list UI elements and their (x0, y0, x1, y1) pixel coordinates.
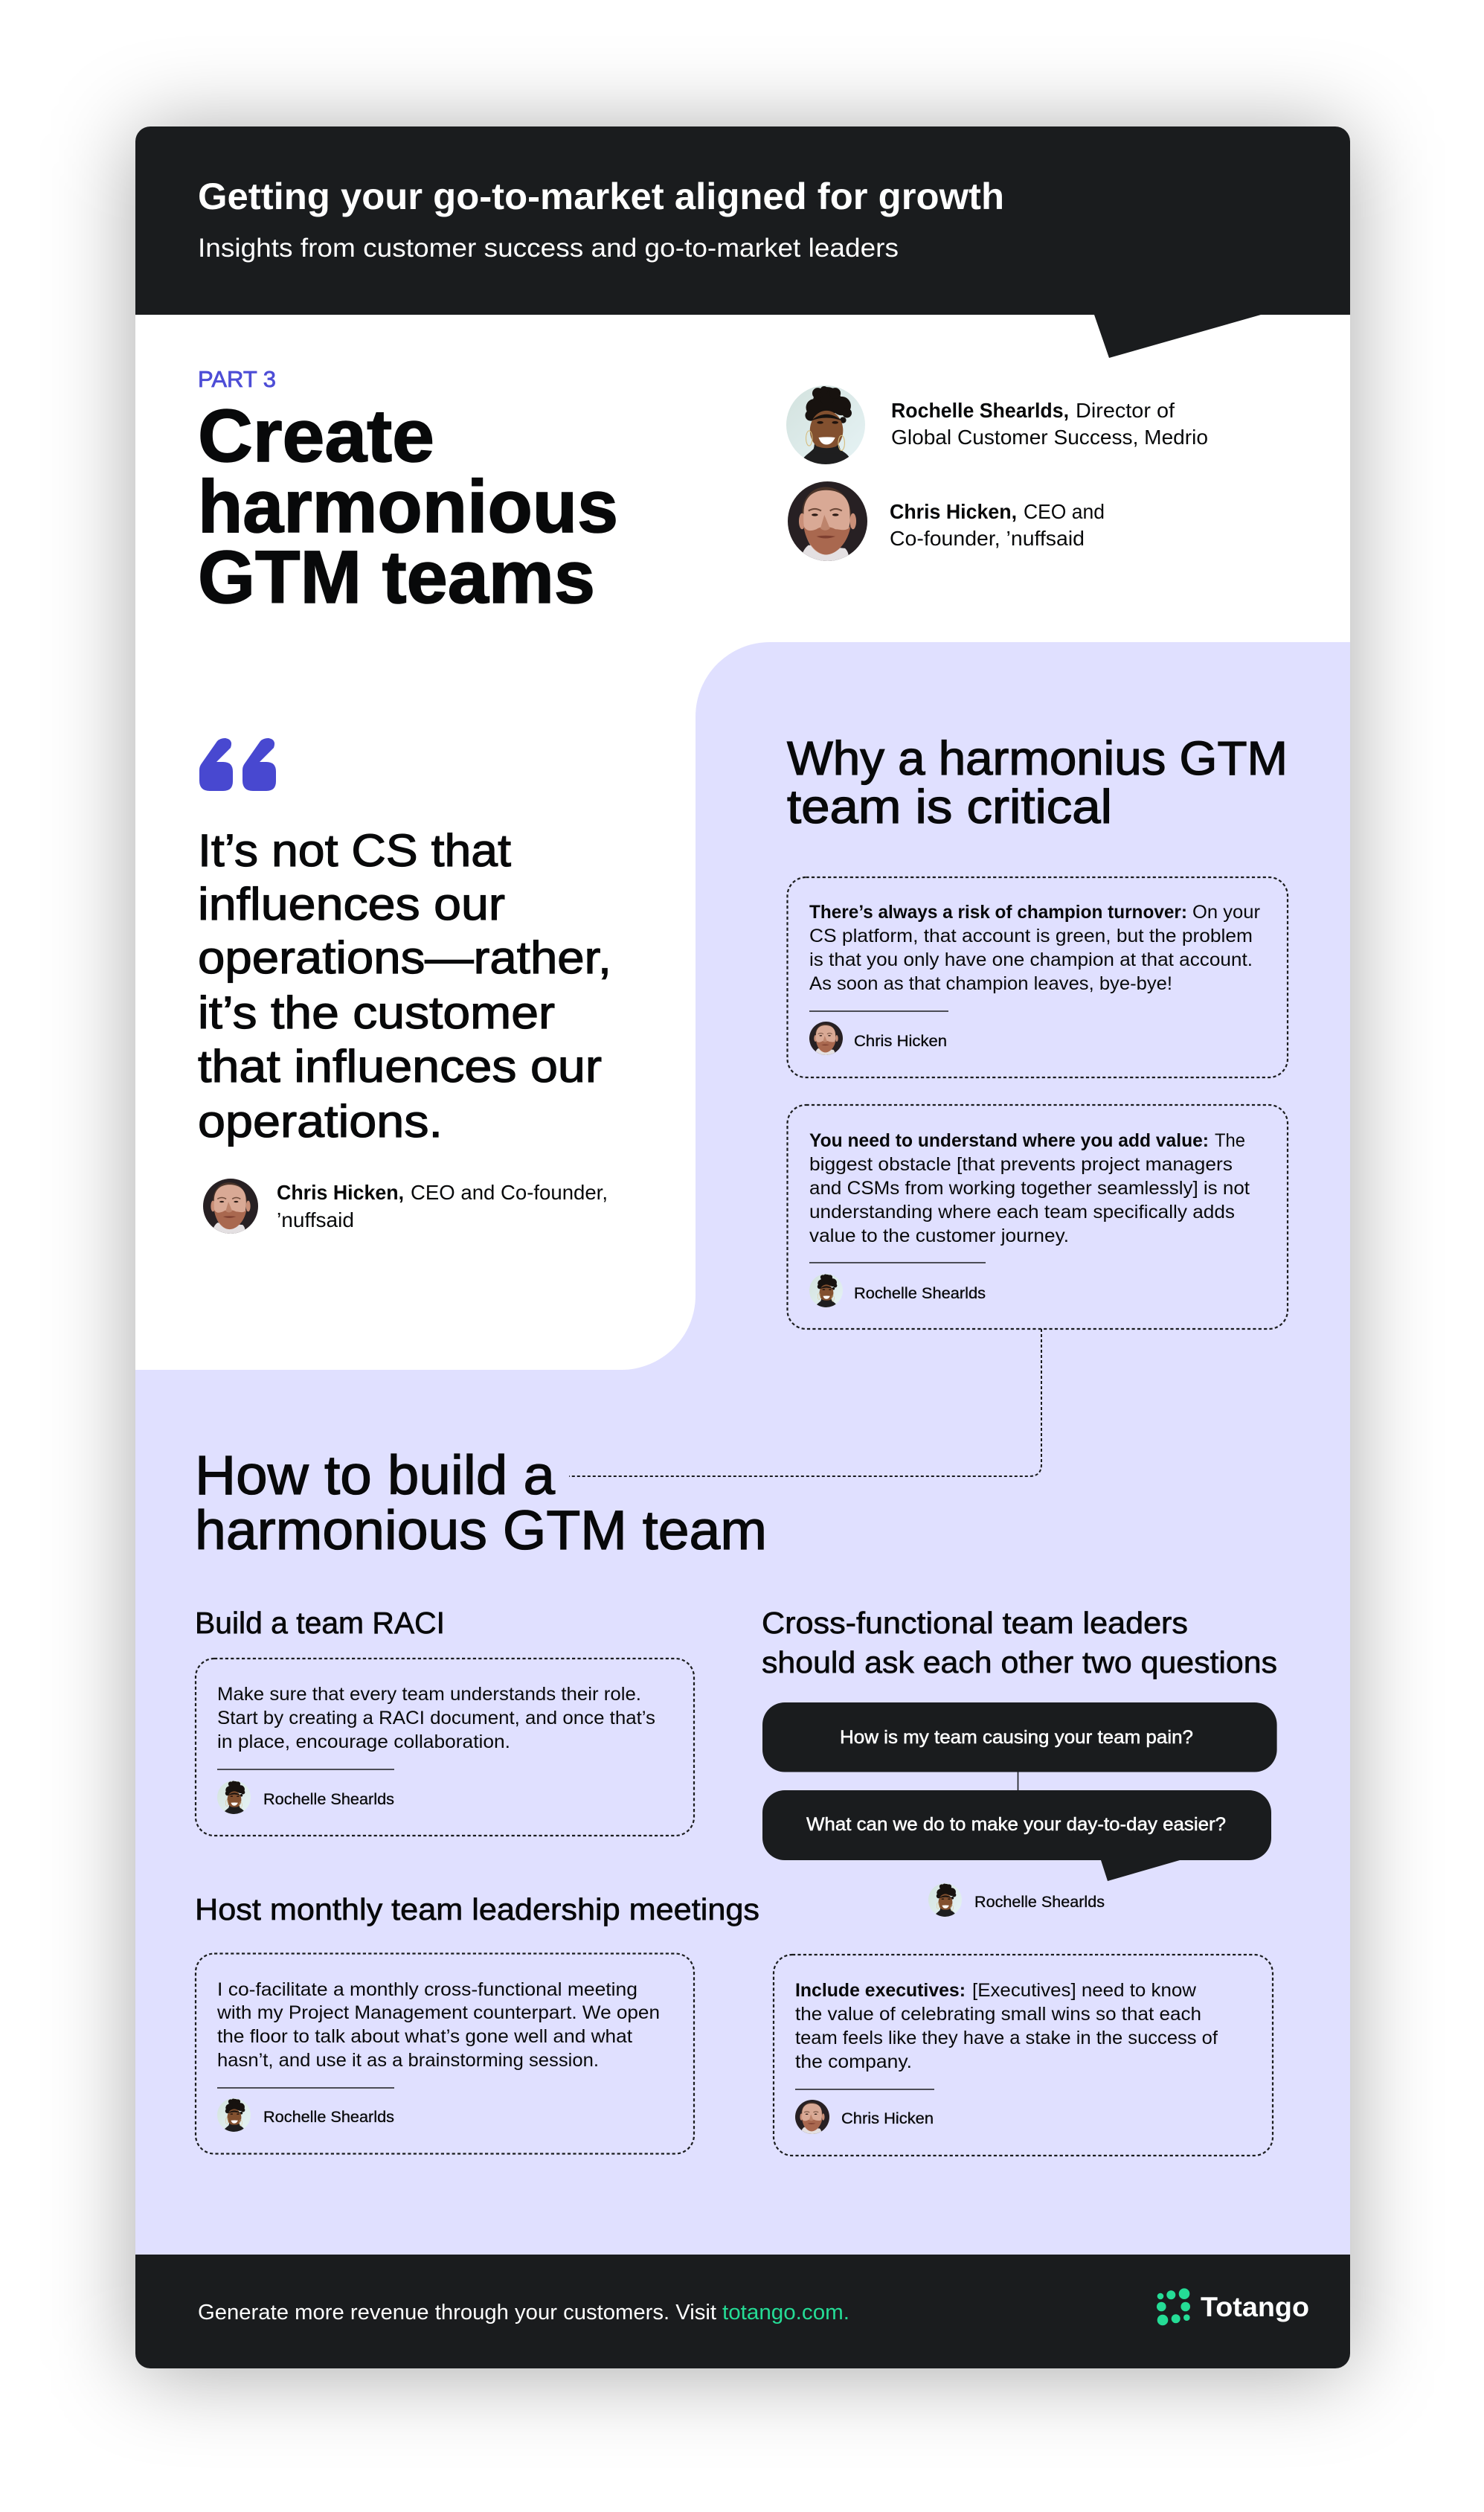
callout: understand where you add value (787, 1105, 1288, 1329)
attribution: Chris Hicken (854, 1033, 947, 1050)
callout: RACI (196, 1659, 694, 1836)
callout text: There’s always a risk of champion turnover: (809, 902, 1187, 923)
callout text: with my Project Management counterpart. We open (216, 2002, 660, 2023)
quote attribution: ’nuffsaid (277, 1208, 354, 1231)
callout text: Make sure that every team understands their role. (217, 1684, 641, 1705)
speaker text (890, 500, 1105, 550)
callout text (217, 1684, 655, 1752)
attribution: Chris Hicken (841, 2110, 934, 2127)
icon: quotation mark (199, 738, 276, 791)
main title: Create (198, 394, 434, 478)
quote attribution (203, 1179, 608, 1234)
callout: include executives (774, 1955, 1273, 2156)
callout text (809, 1130, 1250, 1246)
panel: pull quote (198, 738, 611, 1234)
subheading: cross-functional questions: Cross-functional team leaders (762, 1606, 1188, 1640)
speaker: Chris Hicken (788, 481, 1105, 561)
quote text: operations—rather, (198, 932, 611, 983)
speaker text: Chris Hicken, (890, 500, 1017, 523)
attribution: Rochelle Shearlds (263, 1791, 394, 1808)
lavender background panel (135, 642, 1350, 2262)
callout text (795, 1980, 1218, 2072)
logo: Totango: Totango (1201, 2292, 1309, 2322)
speaker: Rochelle Shearlds (786, 385, 1208, 464)
header banner (135, 126, 1350, 358)
attribution (795, 2100, 934, 2134)
arrow: dotted connector (569, 1329, 1041, 1476)
quote text: influences our (198, 879, 505, 929)
callout text: CS platform, that account is green, but the problem (809, 926, 1253, 946)
card shadow (135, 131, 1350, 2373)
callout text: On your (1192, 902, 1260, 923)
attribution: questions (928, 1883, 1105, 1917)
avatar: Rochelle (786, 385, 865, 464)
callout text (216, 1979, 660, 2071)
footer text: totango.com. (722, 2301, 849, 2324)
subheading: cross-functional questions (762, 1606, 1277, 1679)
main title: harmonious (198, 465, 618, 548)
attribution: questions: Rochelle Shearlds (974, 1894, 1105, 1911)
quote attribution: CEO and Co-founder, (411, 1181, 608, 1204)
callout text: As soon as that champion leaves, bye-bye! (809, 973, 1172, 994)
speaker text: CEO and (1024, 500, 1105, 523)
quote text (198, 825, 611, 1147)
callout text: the value of celebrating small wins so that each (795, 2004, 1201, 2025)
quote attribution: Chris Hicken, (277, 1181, 404, 1204)
callout text: the floor to talk about what’s gone well and what (217, 2026, 632, 2047)
heading: how to build: harmonious GTM team (195, 1499, 767, 1561)
footer text: Generate more revenue through your customers. Visit (198, 2301, 716, 2324)
speaker text: Co-founder, ’nuffsaid (890, 527, 1085, 550)
callout text: [Executives] need to know (972, 1980, 1197, 2001)
attribution: Rochelle Shearlds (854, 1285, 986, 1302)
part label: PART 3 (198, 366, 276, 392)
card background (135, 126, 1350, 2368)
callout: monthly meeting (196, 1954, 694, 2153)
footer (135, 2255, 1350, 2368)
speaker text: Director of (1076, 399, 1175, 422)
subheading: RACI: Build a team RACI (195, 1606, 445, 1640)
question bubble 1 (762, 1702, 1277, 1772)
callout text: You need to understand where you add value: (809, 1130, 1209, 1151)
speaker text: Rochelle Shearlds, (891, 399, 1069, 422)
main title: GTM teams (198, 536, 595, 619)
quote text: that influences our (198, 1041, 602, 1092)
callout text: I co-facilitate a monthly cross-functional meeting (217, 1979, 637, 2000)
callout text: in place, encourage collaboration. (217, 1731, 510, 1752)
subheading: cross-functional questions: should ask each other two questions (762, 1645, 1277, 1679)
quote text: operations. (198, 1096, 443, 1147)
quote text: it’s the customer (198, 987, 555, 1038)
callout text: The (1215, 1130, 1245, 1151)
attribution: Rochelle Shearlds (263, 2109, 394, 2126)
attribution (809, 1274, 986, 1307)
heading: why a harmonious team is critical: team is critical (787, 780, 1112, 833)
question bubble 2: What can we do to make your day-to-day easier? (806, 1814, 1226, 1835)
callout text: and CSMs from working together seamlessly] is not (809, 1178, 1250, 1199)
heading: how to build: How to build a (195, 1444, 556, 1506)
heading: why a harmonious team is critical: Why a harmonius GTM (787, 731, 1288, 785)
question bubble 1: How is my team causing your team pain? (840, 1727, 1193, 1748)
callout text: Start by creating a RACI document, and once that’s (217, 1708, 655, 1728)
callout text: the company. (795, 2051, 912, 2072)
subheading: monthly meetings: Host monthly team leadership meetings (195, 1892, 759, 1926)
callout: champion turnover (787, 877, 1288, 1077)
callout text: biggest obstacle [that prevents project managers (809, 1154, 1233, 1175)
heading: how to build (195, 1444, 767, 1561)
avatar: Chris (788, 481, 867, 561)
callout text: understanding where each team specifically adds (809, 1202, 1235, 1223)
main title (198, 394, 618, 619)
callout text: team feels like they have a stake in the success of (795, 2028, 1218, 2048)
callout text: value to the customer journey. (809, 1225, 1069, 1246)
speaker text: Global Customer Success, Medrio (891, 426, 1208, 449)
attribution (217, 1781, 394, 1814)
header subtitle: Insights from customer success and go-to-market leaders (198, 234, 899, 263)
header title: Getting your go-to-market aligned for growth (198, 176, 1004, 217)
callout text (809, 902, 1260, 994)
logo: Totango (1157, 2288, 1309, 2325)
question bubble 2 (762, 1790, 1271, 1881)
callout text: is that you only have one champion at that account. (809, 949, 1253, 970)
heading: why a harmonious team is critical (787, 731, 1288, 833)
callout text: Include executives: (795, 1980, 966, 2001)
quote text: It’s not CS that (198, 825, 511, 876)
speaker text (891, 399, 1208, 449)
attribution (809, 1022, 947, 1055)
attribution (217, 2098, 394, 2132)
callout text: hasn’t, and use it as a brainstorming session. (217, 2050, 599, 2071)
